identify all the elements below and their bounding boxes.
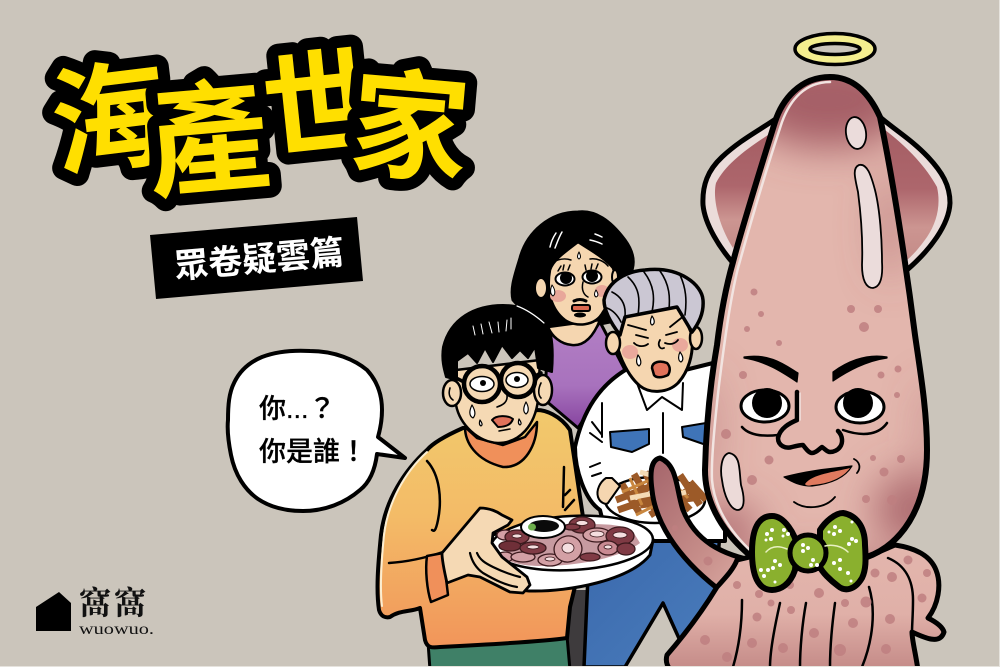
halo [795,33,875,64]
logo: wuowuo: wuowuo. [79,621,154,638]
title: 世 [257,37,384,176]
boy [378,305,654,667]
glasses [464,366,500,402]
eye creases [742,423,887,436]
eyes [741,390,789,422]
body highlights [844,116,868,150]
plate of squid slices [490,512,654,591]
green trousers [428,636,570,667]
dipping sauce dish [521,516,565,538]
tentacle skirt [666,545,944,667]
squid [651,33,957,667]
subtitle tag: 眾卷疑雲篇 [173,234,346,286]
mouth [784,466,852,486]
woman's dark trousers [565,590,595,667]
nose [778,392,842,453]
hair [442,305,553,380]
speech bubble [228,351,405,511]
subtitle tag [150,217,363,299]
speech bubble: 你是誰！ [259,437,367,467]
skin spots [672,288,931,662]
grey hair [604,269,703,335]
right fin [870,117,950,270]
second plate with fried food [605,472,706,523]
hand holding plate [442,508,530,593]
title [44,37,474,214]
green bow tie [752,513,866,590]
logo: wuowuo [36,578,154,638]
logo: wuowuo: 窩窩 [79,578,149,624]
face [617,305,692,391]
title: 產 [142,68,275,214]
raised tentacle arm [651,458,760,588]
shirt pockets [610,422,712,452]
title: 海 [44,48,177,194]
speech bubble: 你...？ [259,394,336,424]
mantle body [702,74,930,571]
white shirt [575,360,725,541]
title: 家 [345,58,474,200]
face [456,360,540,443]
left fin [703,118,790,263]
woman [512,212,633,428]
cuff [426,553,448,602]
eyebrows [744,356,798,382]
jeans [584,530,720,667]
yellow sweater [378,410,584,647]
squid face [741,356,887,507]
collar [465,422,537,467]
old man [575,269,725,667]
